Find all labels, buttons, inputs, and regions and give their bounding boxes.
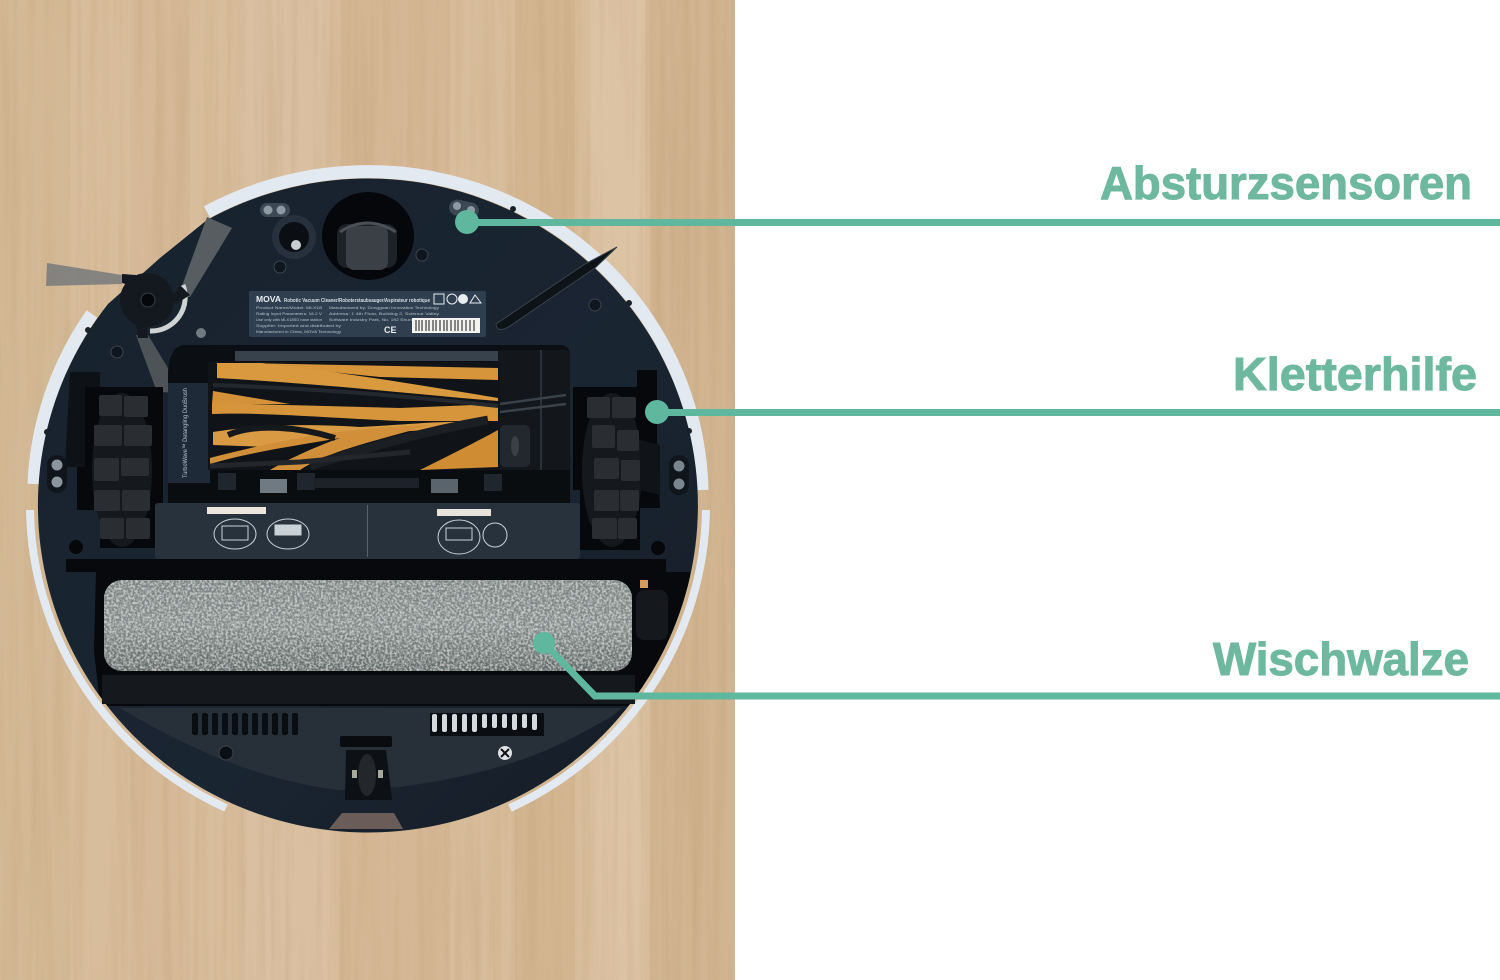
model label: Address: 1 4th Floor, Building 2, Science Valley <box>329 312 439 316</box>
ring screws <box>44 206 692 435</box>
side brush <box>46 217 232 393</box>
rear bumper pad <box>329 813 403 829</box>
callout: Kletterhilfe <box>645 348 1500 424</box>
rear screws <box>219 746 512 760</box>
sensor pad top right <box>448 198 480 220</box>
front bumper bar <box>102 675 635 704</box>
white outer ring <box>30 172 706 808</box>
dark robot body <box>38 178 698 832</box>
left drive wheel <box>65 372 163 548</box>
callout: Kletterhilfe: Kletterhilfe <box>1233 348 1477 400</box>
model label: Supplier: Imported and distributed by <box>256 324 341 328</box>
callout: Absturzsensoren: Absturzsensoren <box>1100 157 1472 209</box>
model label: CE <box>384 325 397 335</box>
front caster well <box>322 192 414 280</box>
rear tank panel <box>120 708 622 790</box>
wood floor background <box>0 0 735 980</box>
lower screws <box>69 540 665 555</box>
callout: Wischwalze: Wischwalze <box>1213 633 1469 685</box>
left cliff sensor <box>47 455 67 493</box>
white right panel <box>735 0 1500 980</box>
right drive wheel <box>573 370 660 550</box>
robot vacuum underside <box>30 172 706 832</box>
dust bin panel <box>155 503 580 559</box>
sensor pad top left <box>260 203 290 217</box>
model label: Manufactured by: Dongguan Innovation Technology <box>329 306 439 310</box>
model label: Use only with MLX18SD base station <box>256 318 322 322</box>
right vents <box>430 713 544 736</box>
callout: Absturzsensoren <box>455 157 1500 234</box>
callout: Wischwalze <box>533 632 1500 696</box>
mop roller <box>94 572 690 706</box>
small round sensor <box>272 215 428 273</box>
left vents <box>192 713 298 735</box>
model label <box>249 291 486 337</box>
model label: Rating Input Parameters: 16.2 V <box>256 312 323 316</box>
model label: Robotic Vacuum Cleaner/Roboterstaubsauger/Aspirateur robotique <box>284 298 430 304</box>
brush name text: TurboWave™ Detangling DuoBrush <box>182 388 189 478</box>
model label: Software Industry Park, No. 192 Shunfeng Avenue <box>329 318 439 322</box>
rear caster wheel <box>340 736 392 800</box>
main brush bay housing <box>168 345 570 490</box>
model label: Manufactured in China, MOVA Technology <box>256 330 341 334</box>
orange main brush rollers <box>208 362 500 470</box>
bay lower latches <box>168 470 570 503</box>
edge sweeper blade <box>496 247 617 330</box>
right cliff sensor <box>669 455 689 495</box>
black strip under bin <box>66 559 666 572</box>
model label: Product Name/Model: MLX18 <box>256 306 322 310</box>
model label: MOVA <box>256 294 281 304</box>
